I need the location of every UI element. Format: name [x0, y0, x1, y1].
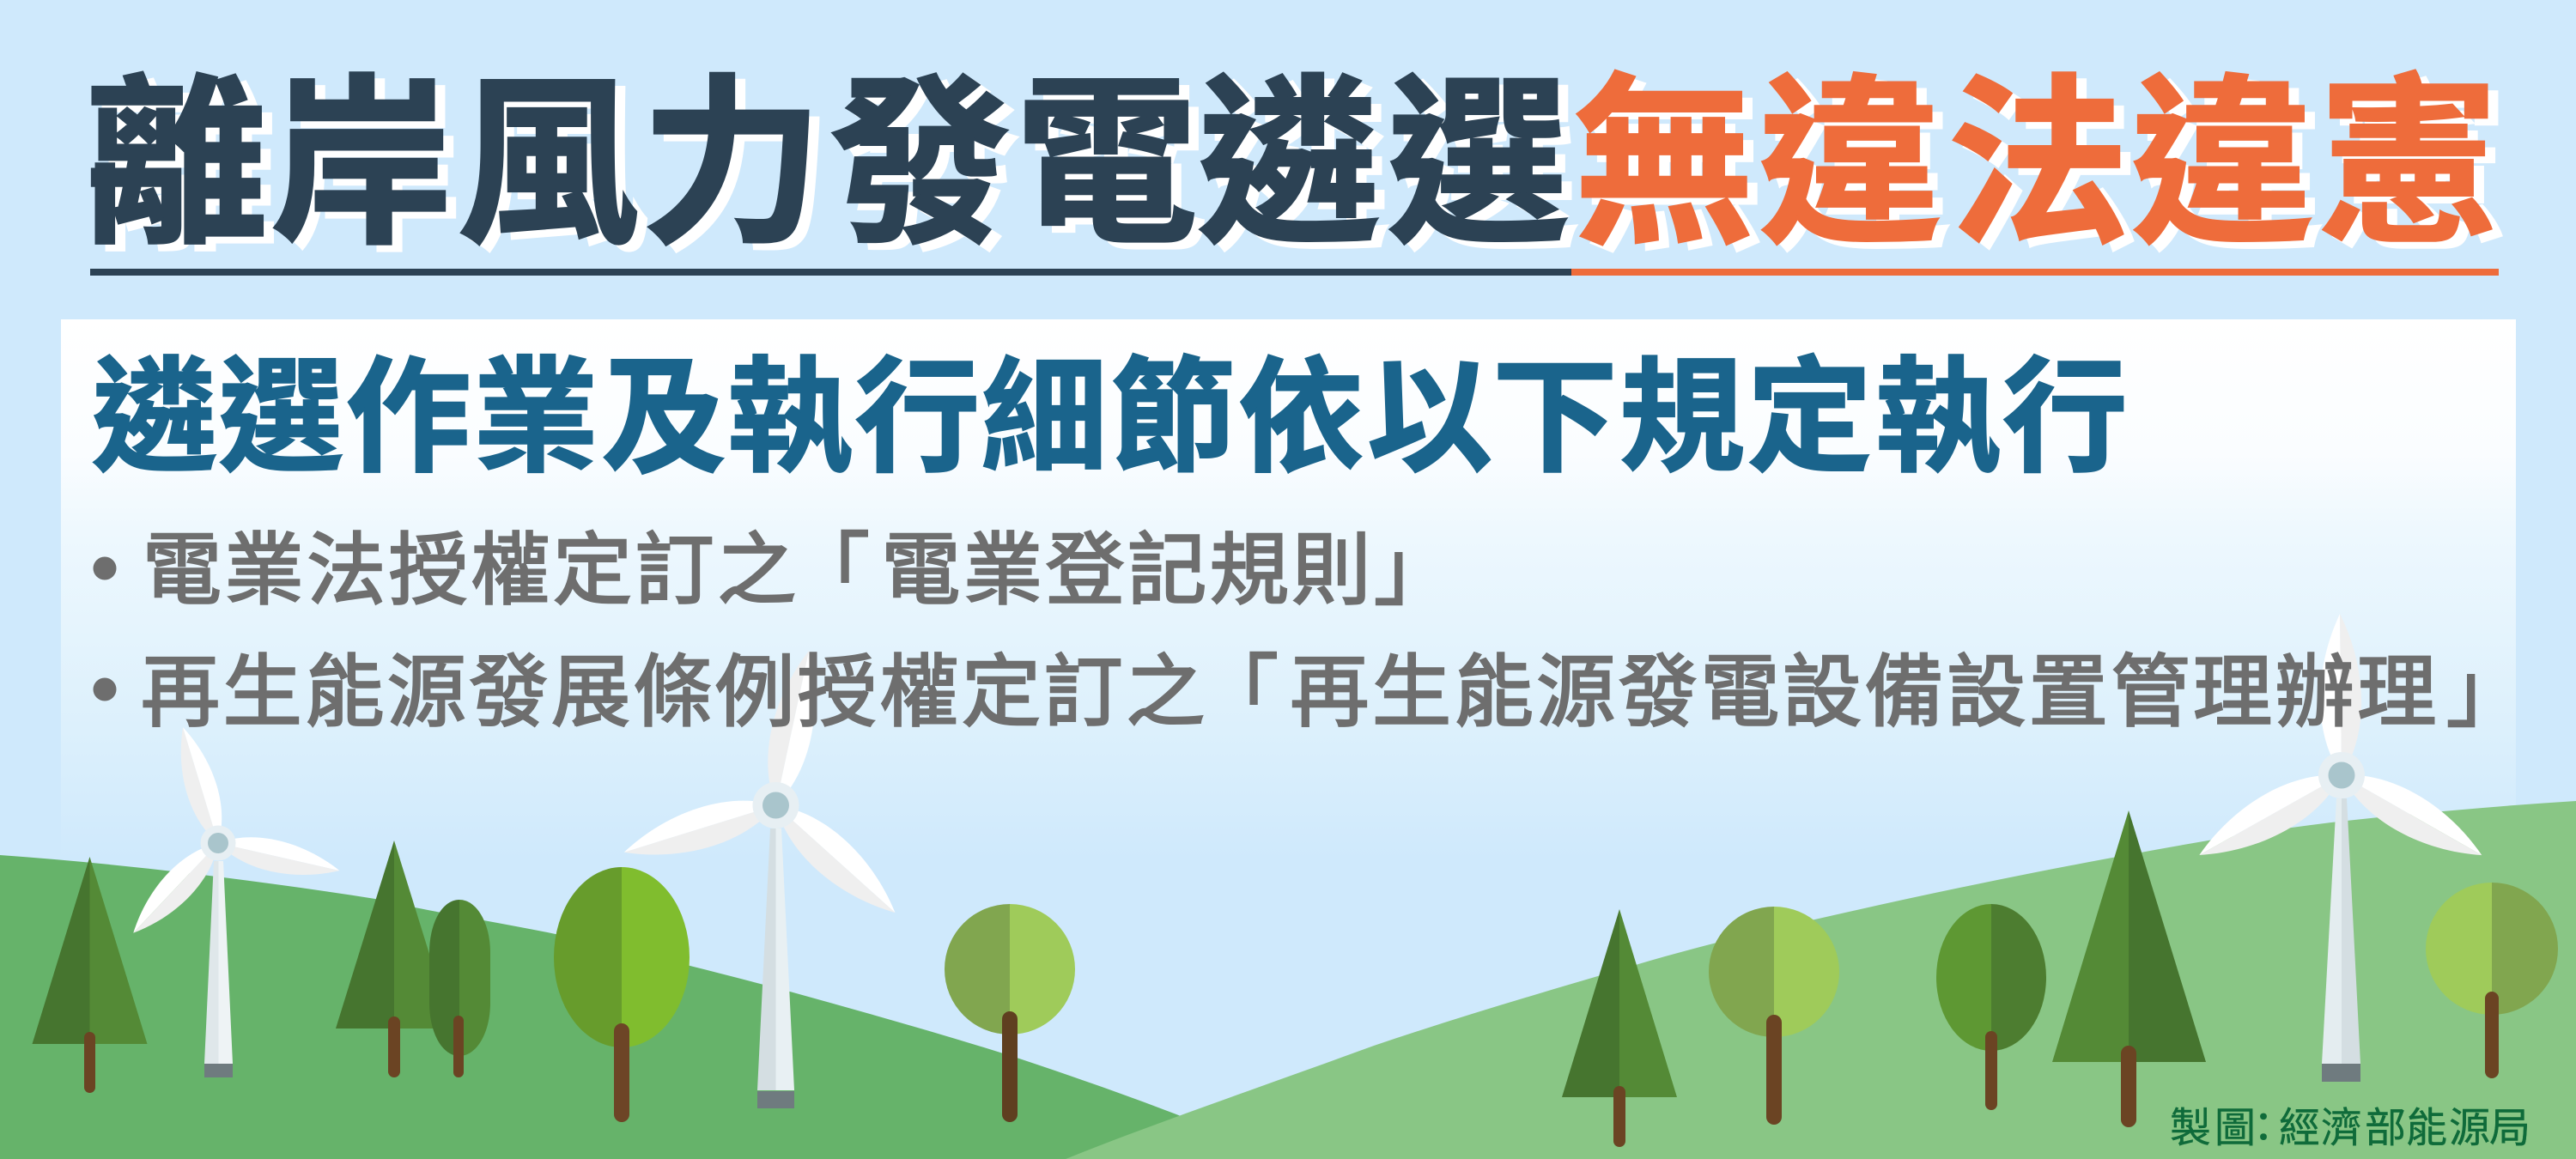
tree: tall pine right	[2052, 810, 2206, 1127]
credit: 製圖：經濟部能源局	[2170, 1106, 2530, 1151]
tree: light round left	[945, 904, 1075, 1122]
tree: pine 1	[33, 857, 148, 1093]
bullet 2: 再生能源發展條例授權定訂之「再生能源發電設備設置管理辦理」	[141, 649, 2528, 737]
tree: cypress	[429, 900, 490, 1077]
title: dark part: 離岸風力發電遴選	[86, 63, 1569, 266]
hill: left	[0, 855, 1288, 1159]
title: orange part: 無違法違憲	[1573, 63, 2500, 266]
tree: pine right 1	[1562, 909, 1677, 1147]
subheading: 遴選作業及執行細節依以下規定執行	[92, 348, 2128, 488]
panel: regulations	[61, 319, 2516, 859]
tree: light round far right	[2426, 883, 2558, 1078]
bullet 1: 電業法授權定訂之「電業登記規則」	[143, 527, 1456, 615]
tree: tall round	[554, 867, 690, 1122]
tree: light round centre	[1709, 907, 1839, 1125]
hill: right	[1066, 801, 2576, 1159]
wind turbine: far right	[2189, 614, 2492, 1082]
wind turbine: centre left	[618, 646, 908, 1108]
title shadow: 離岸風力發電遴選無違法違憲	[96, 70, 2510, 273]
wind turbine: far left	[122, 723, 343, 1077]
tree: dark round	[1936, 904, 2046, 1110]
tree: pine 2	[336, 840, 453, 1077]
title underline	[90, 269, 2499, 276]
